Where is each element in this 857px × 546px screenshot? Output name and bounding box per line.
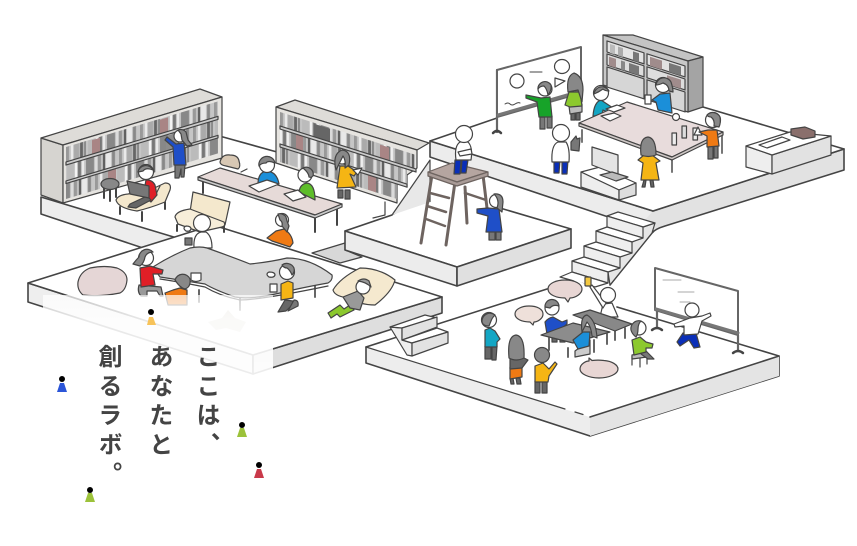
ladder stool — [421, 163, 488, 245]
person: blue girl with cup — [645, 78, 673, 113]
dog — [220, 155, 247, 172]
sleeping cushion — [333, 268, 395, 305]
person: sleeping — [328, 279, 371, 318]
bookshelf: centre — [276, 100, 429, 205]
cafe table — [153, 247, 332, 310]
pawn: blue — [57, 376, 67, 392]
person: green seated — [631, 321, 654, 367]
person: teal boy — [593, 86, 616, 116]
panel: stage — [345, 194, 571, 286]
person: yellow back — [534, 348, 557, 393]
cup — [191, 273, 201, 282]
round stool — [101, 178, 119, 201]
computer desk — [581, 147, 636, 200]
bookshelf: cabinet — [603, 35, 703, 112]
library table — [198, 168, 342, 232]
group: upper floor furniture and people — [421, 35, 831, 245]
person: white with bag — [552, 124, 580, 174]
person: white with card — [590, 285, 618, 317]
person: white writing — [674, 303, 711, 348]
whiteboard: lower — [652, 268, 743, 353]
person: blue on stage — [477, 194, 503, 240]
person: white with cup — [184, 214, 212, 248]
person: teal standing — [482, 312, 500, 360]
upper table — [579, 102, 723, 172]
front table — [541, 323, 610, 350]
sofa with reader — [116, 164, 170, 221]
pawn: green — [237, 422, 247, 437]
stairs to upper floor — [560, 212, 655, 287]
person: yellow-green girl — [565, 73, 583, 120]
person: orange back — [165, 274, 190, 305]
counter with books — [746, 127, 831, 174]
whiteboard: upper — [493, 47, 581, 133]
back table — [573, 310, 632, 340]
person: red girl — [133, 249, 163, 296]
pawn: green lower — [85, 487, 95, 502]
person: blue boy at table — [249, 156, 279, 192]
bookshelf: left — [41, 89, 222, 203]
speech bubble: beige — [515, 306, 543, 325]
panel: lower right platform — [366, 280, 779, 436]
group: library furniture and people — [101, 129, 362, 248]
speech bubble: pink upper — [548, 280, 582, 302]
person: blue girl seated — [568, 315, 597, 357]
panel: library floor — [41, 137, 430, 263]
person: green boy — [284, 167, 315, 201]
person: yellow back view — [638, 137, 660, 187]
group: lower right people and furniture — [482, 268, 743, 393]
person: gray with orange skirt — [509, 335, 528, 384]
heading column: ここは、: ここは、 — [192, 344, 219, 461]
person: orange with flask — [699, 112, 720, 159]
panel: top right platform — [430, 107, 844, 287]
person: yellow with cup — [267, 263, 298, 312]
heading column: あなたと: あなたと — [145, 344, 172, 461]
person: blue man seated — [545, 299, 567, 342]
card — [585, 277, 591, 286]
person: yellow reading — [335, 150, 362, 199]
panel: lower left platform — [28, 225, 442, 374]
faded rug — [208, 310, 246, 332]
pawn: red — [254, 462, 264, 478]
rug — [78, 266, 127, 296]
bottles — [672, 114, 702, 145]
small stairs — [390, 315, 448, 356]
person: white on ladder — [454, 126, 472, 174]
heading column: 創るラボ。: 創るラボ。 — [94, 344, 121, 490]
pawn: yellow — [147, 309, 156, 325]
sofa empty — [175, 192, 230, 232]
person: orange girl seated — [267, 214, 293, 247]
speech bubble: pink lower — [580, 358, 618, 378]
gray slab under stage — [312, 243, 362, 263]
group: cafe furniture and people — [78, 247, 395, 332]
person: green drawing — [526, 82, 552, 129]
person: blue at shelf — [165, 129, 192, 178]
white fade band over the text area — [43, 295, 273, 380]
